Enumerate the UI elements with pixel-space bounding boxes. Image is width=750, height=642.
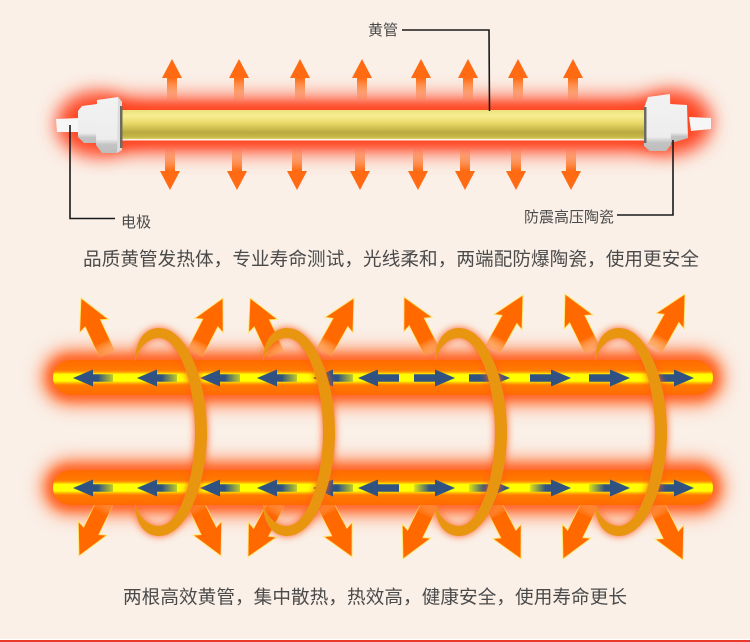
upper glowing tube (53, 360, 713, 395)
left ceramic end (56, 97, 122, 153)
bottom red edge (0, 639, 750, 642)
leader line: yellow tube (402, 30, 490, 111)
leader line: electrode (70, 125, 115, 218)
flow arrows upper tube (73, 370, 694, 386)
yellow tube (118, 110, 650, 140)
tube glow (42, 350, 724, 515)
tube red glow (56, 90, 712, 156)
heating rings glow (135, 328, 667, 536)
leader line: ceramic (617, 140, 673, 215)
lower glowing tube (53, 470, 713, 505)
upward heat arrows (162, 59, 583, 100)
caption: single tube: 品质黄管发热体，专业寿命测试，光线柔和，两端配防爆陶瓷，使用更安全 (83, 248, 699, 270)
flow arrows lower tube (73, 480, 694, 496)
panel: single heater tube diagram (56, 22, 712, 231)
panel: twin tube diagram (42, 286, 724, 567)
label: yellow tube: 黄管 (368, 22, 398, 39)
label: ceramic: 防震高压陶瓷 (524, 209, 614, 226)
caption: twin tubes: 两根高效黄管，集中散热，热效高，健康安全，使用寿命更长 (123, 586, 627, 608)
downward heat arrows (160, 149, 581, 190)
heating rings (135, 328, 667, 536)
outward arrows top (66, 286, 699, 361)
right ceramic end (644, 94, 711, 151)
label: electrode: 电极 (121, 214, 151, 231)
outward arrows bottom (65, 493, 697, 567)
